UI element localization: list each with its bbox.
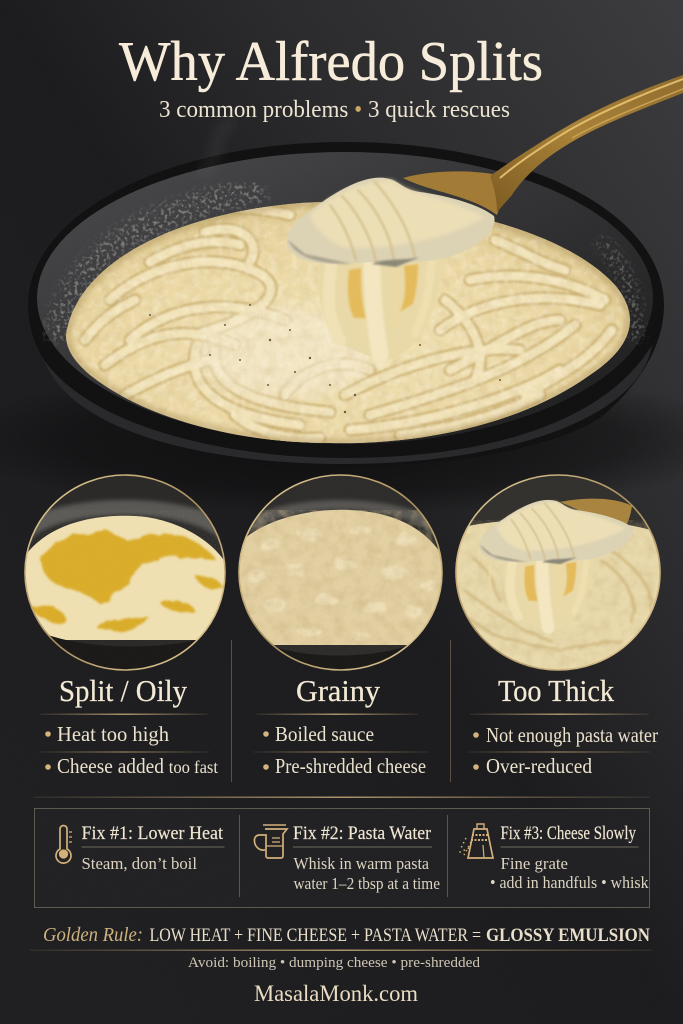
golden rule: [43, 924, 651, 946]
icon: thermometer: [56, 826, 72, 863]
gold frame: [25, 475, 225, 670]
heading: Grainy: [296, 673, 380, 708]
heading: Too Thick: [498, 673, 614, 708]
cheese flecks on bowl wall: [58, 190, 637, 340]
thick pasta folds: [465, 550, 651, 648]
fix 1 text: Steam, don’t boil: [82, 854, 197, 873]
pan lower rim: [278, 646, 405, 670]
pasta highlight strokes: [85, 208, 612, 438]
bullet: over-reduced: Over-reduced: [486, 754, 592, 778]
golden rule result: GLOSSY EMULSION: [486, 926, 651, 946]
sauce grain: [29, 510, 222, 632]
website credit: MasalaMonk.com: [254, 981, 418, 1006]
gold frame: [239, 475, 442, 670]
curdled sauce: [238, 510, 445, 645]
edge shading of sauce: [66, 202, 630, 443]
avoid line: Avoid: boiling • dumping cheese • pre-shredded: [188, 955, 480, 971]
column: grainy: [253, 673, 429, 778]
sauce texture: [238, 510, 445, 645]
fix 3: • add in handfuls • whisk: [490, 873, 649, 892]
curds: [246, 525, 436, 640]
column divider: [232, 640, 450, 782]
panel: fixes: [34, 808, 650, 908]
fix 1 heading: Fix #1: Lower Heat: [82, 824, 224, 844]
bowl shadow: [0, 365, 683, 515]
sauce blob on spoon with cheese strands: [287, 178, 495, 360]
golden rule formula: LOW HEAT + FINE CHEESE + PASTA WATER =: [150, 926, 481, 946]
black pepper specks: [149, 304, 501, 413]
sauce texture: [457, 520, 657, 668]
pan background: [470, 476, 616, 526]
bullet: cheese added too fast: Cheese added too fast: [57, 754, 218, 778]
pasta shadow strokes: [85, 208, 612, 438]
spoon bowl: [403, 171, 501, 215]
column: too thick: [468, 673, 658, 778]
spoon handle: [490, 75, 683, 212]
grated parmesan: [195, 307, 375, 397]
gold frame: [456, 475, 660, 670]
subtitle: 3 common problems • 3 quick rescues: [159, 97, 510, 123]
bullet: heat too high: Heat too high: [57, 722, 169, 746]
icon: measuring cup: [254, 825, 287, 858]
bullet: not enough pasta water: Not enough pasta water: [486, 723, 658, 747]
sauce base: [66, 202, 630, 444]
hero photo: bowl of alfredo with spoon: [0, 75, 683, 515]
fix 2 text: Whisk in warm pasta: [294, 854, 430, 873]
fix 3 heading: Fix #3: Cheese Slowly: [500, 824, 637, 844]
panel box: [34, 808, 650, 908]
fix 3 text: Fine grate: [500, 854, 568, 873]
fix 3: [458, 824, 649, 892]
spoon: [560, 498, 632, 524]
bullet: pre-shredded cheese: Pre-shredded cheese: [275, 754, 426, 778]
column: split oily: [39, 673, 218, 778]
bullet: boiled sauce: Boiled sauce: [275, 722, 374, 746]
spoon: [403, 75, 683, 215]
pan background: [28, 476, 223, 646]
golden rule label: Golden Rule:: [43, 924, 143, 946]
problem photo: grainy sauce: [235, 470, 447, 675]
icon: cheese grater: [458, 824, 493, 858]
bowl body: [28, 142, 664, 466]
steam: [200, 120, 235, 175]
yellow oil pools: [30, 530, 222, 631]
fix 2: water 1–2 tbsp at a time: [294, 874, 440, 893]
sauce and pasta: [66, 202, 630, 444]
bowl dark rim: [44, 345, 652, 464]
problem photo: split oily sauce: [20, 470, 230, 675]
pan background: [247, 476, 438, 656]
bowl inner wall: [37, 152, 653, 444]
fix 2 heading: Fix #2: Pasta Water: [293, 824, 431, 844]
fix 2: [254, 824, 440, 893]
cream sauce: [20, 516, 230, 640]
pan lower rim: [50, 636, 196, 669]
title: Why Alfredo Splits: [119, 31, 543, 93]
sauce texture: [82, 210, 610, 440]
heading: Split / Oily: [59, 673, 187, 708]
fix 1: [56, 824, 225, 873]
lifted sauce: [479, 500, 633, 631]
problem photo: too thick sauce: [450, 470, 665, 675]
thick sauce: [452, 519, 665, 675]
